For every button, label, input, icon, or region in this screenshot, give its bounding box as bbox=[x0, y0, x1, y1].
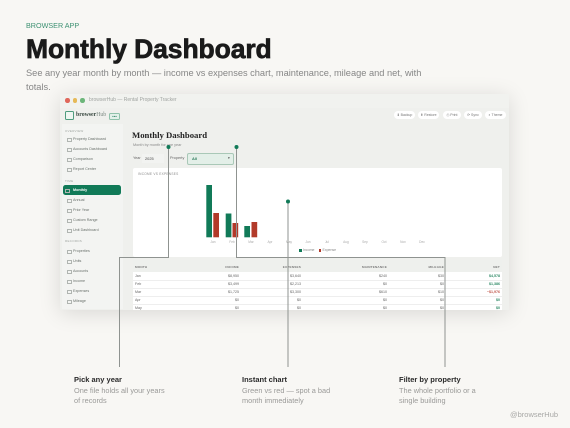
table: monthly totals: MONTH bbox=[135, 265, 147, 269]
property filter: All bbox=[192, 156, 197, 161]
chart month labels: Mar bbox=[248, 240, 254, 244]
toolbar buttons: ◐ Theme bbox=[489, 113, 502, 117]
table: monthly totals: $2,213 bbox=[290, 282, 301, 286]
sidebar navigation: Monthly bbox=[73, 188, 87, 192]
table: monthly totals: $8,950 bbox=[228, 274, 239, 278]
window title bar bbox=[60, 94, 509, 108]
table: monthly totals: $0 bbox=[440, 282, 444, 286]
callout: filter by property: The whole portfolio or a bbox=[399, 386, 476, 395]
chart month labels: Jul bbox=[325, 240, 329, 244]
chart month labels bbox=[210, 240, 425, 244]
chart title: INCOME VS EXPENSES bbox=[138, 172, 178, 176]
property filter bbox=[170, 153, 234, 165]
callout: filter by property: Filter by property bbox=[399, 375, 461, 384]
table: monthly totals: $0 bbox=[297, 298, 301, 302]
dashboard subheading: Month by month for one year bbox=[133, 142, 182, 146]
callout: instant chart: month immediately bbox=[242, 396, 304, 405]
window title: browserHub — Rental Property Tracker bbox=[89, 97, 177, 103]
property filter: Property bbox=[170, 156, 184, 160]
chart month labels: Aug bbox=[343, 240, 349, 244]
sidebar bbox=[62, 124, 123, 309]
callout: pick any year bbox=[74, 375, 165, 405]
app logo bbox=[65, 111, 120, 120]
table: monthly totals: NET bbox=[493, 265, 500, 269]
chart month labels: Sep bbox=[362, 240, 368, 244]
sidebar navigation: Property Dashboard bbox=[73, 137, 106, 141]
dashboard heading: Monthly Dashboard bbox=[132, 130, 207, 140]
app logo: browserHub bbox=[76, 112, 106, 118]
table: monthly totals: Mar bbox=[135, 290, 141, 294]
toolbar buttons: ⬇ Backup bbox=[397, 113, 412, 117]
table: monthly totals: $0 bbox=[235, 306, 239, 310]
chart month labels: Jan bbox=[210, 240, 216, 244]
table: monthly totals: INCOME bbox=[225, 265, 239, 269]
sidebar navigation: Annual bbox=[73, 198, 84, 202]
table: monthly totals: Jan bbox=[135, 274, 141, 278]
year picker: 2025 bbox=[145, 156, 154, 160]
subtitle: totals. bbox=[26, 82, 51, 92]
table: monthly totals: $0 bbox=[496, 306, 500, 310]
table: monthly totals: $610 bbox=[379, 290, 387, 294]
chart month labels: Oct bbox=[382, 240, 386, 244]
subtitle bbox=[26, 68, 421, 92]
eyebrow label: BROWSER APP bbox=[26, 21, 79, 30]
table: monthly totals: $4,578 bbox=[489, 274, 500, 278]
table: monthly totals: −$1,976 bbox=[487, 290, 500, 294]
table: monthly totals: EXPENSES bbox=[283, 265, 301, 269]
table: monthly totals: $10 bbox=[438, 290, 444, 294]
chart month labels: May bbox=[286, 240, 292, 244]
chart month labels: Feb bbox=[229, 240, 235, 244]
table: monthly totals: $3,499 bbox=[228, 282, 239, 286]
property filter: ▾ bbox=[228, 156, 230, 160]
sidebar navigation: TIME bbox=[65, 179, 73, 183]
sidebar navigation: Properties bbox=[73, 249, 90, 253]
callout: pick any year: Pick any year bbox=[74, 375, 122, 384]
sidebar navigation: Accounts Dashboard bbox=[73, 147, 107, 151]
toolbar buttons: ⬆ Restore bbox=[420, 113, 437, 117]
chart month labels: Apr bbox=[268, 240, 272, 244]
sidebar navigation: Units bbox=[73, 259, 81, 263]
traffic lights bbox=[65, 98, 85, 103]
sidebar navigation: Income bbox=[73, 279, 85, 283]
sidebar navigation bbox=[63, 129, 121, 304]
table: monthly totals: Feb bbox=[135, 282, 141, 286]
watermark: @browserHub bbox=[510, 410, 558, 419]
sidebar navigation: Unit Dashboard bbox=[73, 228, 99, 232]
table: monthly totals: $3,640 bbox=[290, 274, 301, 278]
toolbar buttons bbox=[394, 111, 506, 119]
table: monthly totals: $1,386 bbox=[489, 282, 500, 286]
table: monthly totals: May bbox=[135, 306, 142, 310]
chart legend: Expense bbox=[322, 248, 336, 252]
callout: instant chart: Instant chart bbox=[242, 375, 287, 384]
chart month labels: Jun bbox=[305, 240, 311, 244]
table: monthly totals: $0 bbox=[440, 298, 444, 302]
callout: instant chart: Green vs red — spot a bad bbox=[242, 386, 330, 395]
subtitle: See any year month by month — income vs expenses chart, maintenance, mileage and net, with bbox=[26, 68, 421, 78]
app logo: ●●● bbox=[112, 114, 117, 118]
sidebar navigation: Prior Year bbox=[73, 208, 89, 212]
sidebar navigation: Accounts bbox=[73, 269, 88, 273]
bar chart bbox=[206, 185, 258, 238]
table: monthly totals: MILEAGE bbox=[428, 265, 444, 269]
toolbar buttons: ⟳ Sync bbox=[467, 113, 479, 117]
sidebar navigation: OVERVIEW bbox=[65, 129, 84, 133]
table: monthly totals: $0 bbox=[235, 298, 239, 302]
callout: instant chart bbox=[242, 375, 330, 405]
title: Monthly Dashboard bbox=[26, 34, 272, 64]
sidebar navigation: Mileage bbox=[73, 299, 86, 303]
table: monthly totals: $0 bbox=[383, 298, 387, 302]
table: monthly totals: MAINTENANCE bbox=[362, 265, 387, 269]
sidebar navigation: Report Center bbox=[73, 167, 96, 171]
chart month labels: Dec bbox=[419, 240, 425, 244]
table: monthly totals: $0 bbox=[440, 306, 444, 310]
table: monthly totals: $3,300 bbox=[290, 290, 301, 294]
sidebar navigation: Custom Range bbox=[73, 218, 98, 222]
toolbar buttons: ⎙ Print bbox=[446, 113, 457, 117]
table: monthly totals: $240 bbox=[379, 274, 387, 278]
table: monthly totals bbox=[133, 260, 502, 310]
callout: pick any year: of records bbox=[74, 396, 107, 405]
chart month labels: Nov bbox=[400, 240, 406, 244]
callout: filter by property bbox=[399, 375, 476, 405]
sidebar navigation: Comparison bbox=[73, 157, 93, 161]
callout: filter by property: single building bbox=[399, 396, 446, 405]
sidebar navigation: Expenses bbox=[73, 289, 89, 293]
sidebar navigation: RECORDS bbox=[65, 239, 82, 243]
table: monthly totals: $0 bbox=[383, 282, 387, 286]
table: monthly totals: $1,725 bbox=[228, 290, 239, 294]
table: monthly totals: Apr bbox=[135, 298, 141, 302]
year picker: Year bbox=[133, 156, 141, 160]
callout: pick any year: One file holds all your years bbox=[74, 386, 165, 395]
table: monthly totals: $0 bbox=[496, 298, 500, 302]
chart legend: Income bbox=[303, 248, 314, 252]
table: monthly totals: $30 bbox=[438, 274, 444, 278]
chart legend bbox=[299, 248, 336, 252]
year picker bbox=[133, 156, 154, 160]
chart panel: income vs expenses bbox=[133, 168, 502, 257]
table: monthly totals: $0 bbox=[297, 306, 301, 310]
app window screenshot bbox=[60, 94, 509, 310]
table: monthly totals: $0 bbox=[383, 306, 387, 310]
